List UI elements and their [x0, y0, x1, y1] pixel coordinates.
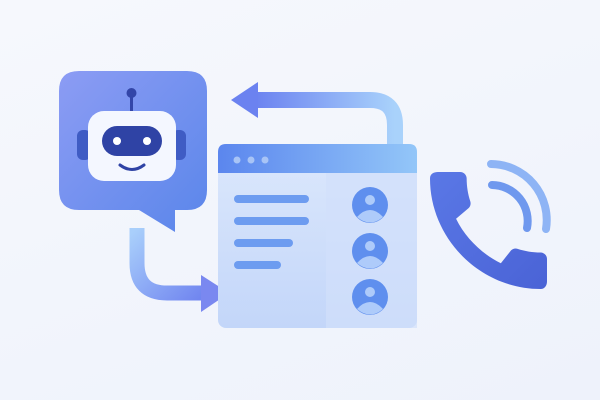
robot ears — [77, 130, 186, 160]
avatars — [352, 187, 388, 315]
icon: phone — [430, 164, 547, 289]
robot head — [88, 111, 176, 181]
app window — [218, 144, 417, 328]
phone waves — [491, 164, 547, 229]
window header — [218, 144, 417, 173]
arrow: bottom to window — [137, 228, 229, 312]
chat bubble with robot — [59, 71, 207, 232]
text lines — [234, 195, 309, 269]
robot antenna — [126, 88, 136, 113]
arrow: top return — [231, 82, 395, 146]
